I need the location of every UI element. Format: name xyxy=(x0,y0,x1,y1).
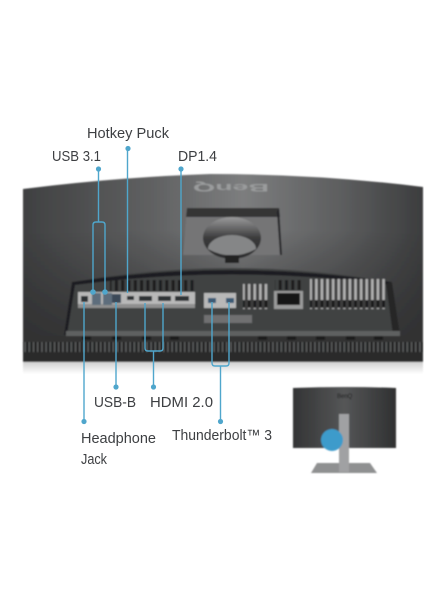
ports xyxy=(81,293,189,305)
label: Hotkey Puck: Hotkey Puck xyxy=(87,125,169,142)
power socket xyxy=(274,291,303,309)
callout: Hotkey Puck xyxy=(126,148,128,293)
label: Thunderbolt 3: Thunderbolt™ 3 xyxy=(172,427,272,444)
bottom edge xyxy=(23,352,423,362)
callout: USB 3.1 xyxy=(93,169,105,293)
label: Headphone Jack: Headphone xyxy=(81,430,156,447)
monitor back shell xyxy=(23,174,423,362)
callout lines xyxy=(84,148,229,421)
label: USB-B: USB-B xyxy=(94,394,136,411)
vents beside power socket xyxy=(243,284,268,309)
mini stand column xyxy=(339,414,349,472)
mounting tabs xyxy=(82,336,383,340)
brand logo: BenQ xyxy=(193,181,269,194)
label: Headphone Jack: Jack xyxy=(81,451,107,468)
shadow below monitor xyxy=(23,362,423,374)
label: HDMI 2.0: HDMI 2.0 xyxy=(150,394,213,411)
callout: Thunderbolt 3 xyxy=(212,302,229,421)
stand mount recess xyxy=(183,208,282,263)
label: USB 3.1: USB 3.1 xyxy=(52,148,101,165)
thunderbolt port plate xyxy=(204,293,236,308)
callout: HDMI 2.0 xyxy=(145,303,163,387)
label: DP1.4: DP1.4 xyxy=(178,148,217,165)
lower vent band xyxy=(23,336,423,353)
callout: DP1.4 xyxy=(180,169,182,295)
mini stand base xyxy=(311,463,377,473)
callout dots xyxy=(81,146,223,424)
port recess xyxy=(64,268,400,335)
main port plate xyxy=(78,292,195,308)
callout: Headphone Jack xyxy=(83,302,85,421)
callout: USB-B xyxy=(115,302,117,387)
highlight circle xyxy=(321,429,343,451)
upper slots xyxy=(110,278,196,291)
label sticker xyxy=(204,315,252,323)
mini monitor locator xyxy=(293,387,396,473)
label: Headphone Jack xyxy=(81,430,156,468)
monitor rear view xyxy=(23,174,423,374)
mini logo: BenQ xyxy=(337,394,353,400)
mini monitor screen xyxy=(293,387,396,448)
